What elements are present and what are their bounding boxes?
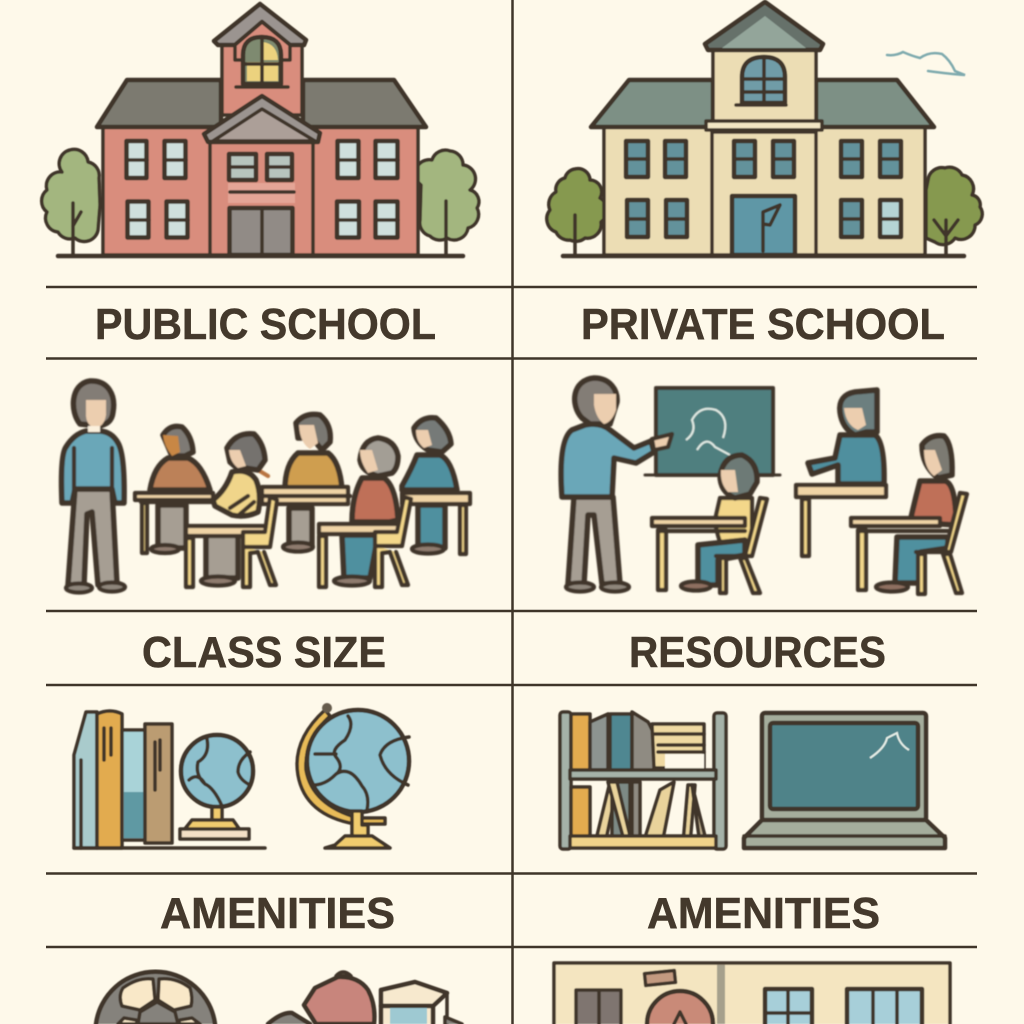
door: [732, 196, 795, 255]
student with red shirt: [851, 436, 967, 594]
yellow books: [571, 714, 590, 844]
icon: bird cloud squiggle: [887, 52, 965, 75]
door: [230, 208, 292, 255]
main roof: [591, 80, 934, 127]
tree right: [415, 150, 479, 255]
desk back left: [135, 493, 213, 553]
student back right: [402, 418, 457, 554]
window light large: [847, 989, 922, 1024]
desk and chair front left: [186, 497, 277, 587]
hanging sign: [644, 970, 676, 986]
illustration: public school building: [42, 4, 479, 256]
central pavilion: [706, 121, 822, 255]
student with yellow shirt: [652, 455, 767, 593]
illustration: sports equipment: [268, 972, 462, 1024]
tree left: [547, 169, 607, 256]
lower books: [595, 782, 707, 844]
student back left: [150, 426, 210, 553]
illustration: books and globes: [74, 703, 409, 848]
illustration: crowded public classroom: [62, 381, 470, 592]
books: [74, 711, 265, 848]
tower: [705, 2, 823, 122]
tower: [214, 4, 306, 115]
ground: [58, 254, 463, 258]
illustration: private school building: [547, 2, 982, 256]
heading: amenities right: AMENITIES: [647, 889, 880, 938]
large globe: [297, 703, 409, 848]
desk and chair front right: [319, 497, 411, 587]
window dark: [576, 990, 621, 1024]
ground: [563, 254, 964, 258]
desk back middle: [262, 487, 350, 504]
tree left: [42, 149, 100, 255]
heading: private school: PRIVATE SCHOOL: [581, 300, 945, 349]
heading: public school: PUBLIC SCHOOL: [95, 300, 436, 349]
desk back right: [402, 493, 470, 554]
bottom board: [570, 836, 716, 848]
shelf board: [570, 770, 716, 779]
windows: [126, 141, 398, 238]
main body: [103, 127, 418, 255]
main roof: [97, 80, 426, 127]
illustration: laptop: [744, 713, 945, 848]
chalkboard: [645, 388, 780, 475]
tree right: [926, 167, 982, 256]
illustration: bookshelf: [560, 712, 726, 849]
central pavilion: [204, 96, 320, 255]
heading: amenities left: AMENITIES: [160, 889, 395, 938]
upper books: [590, 712, 704, 776]
main body: [604, 127, 925, 255]
ball: [647, 991, 713, 1024]
heading: class size: CLASS SIZE: [142, 628, 386, 677]
student front left: [201, 434, 268, 586]
teacher: [62, 381, 125, 592]
window light small: [765, 989, 812, 1024]
illustration: small private classroom: [561, 378, 967, 594]
illustration: soccer ball: [96, 972, 215, 1024]
windows: [626, 141, 901, 237]
illustration: school building interior: [554, 963, 950, 1024]
student back middle: [283, 414, 342, 552]
heading: resources: RESOURCES: [629, 628, 886, 677]
teacher pointing: [561, 378, 672, 592]
small globe: [180, 735, 253, 839]
student front right: [334, 438, 398, 586]
student with teal shirt: [796, 390, 886, 556]
